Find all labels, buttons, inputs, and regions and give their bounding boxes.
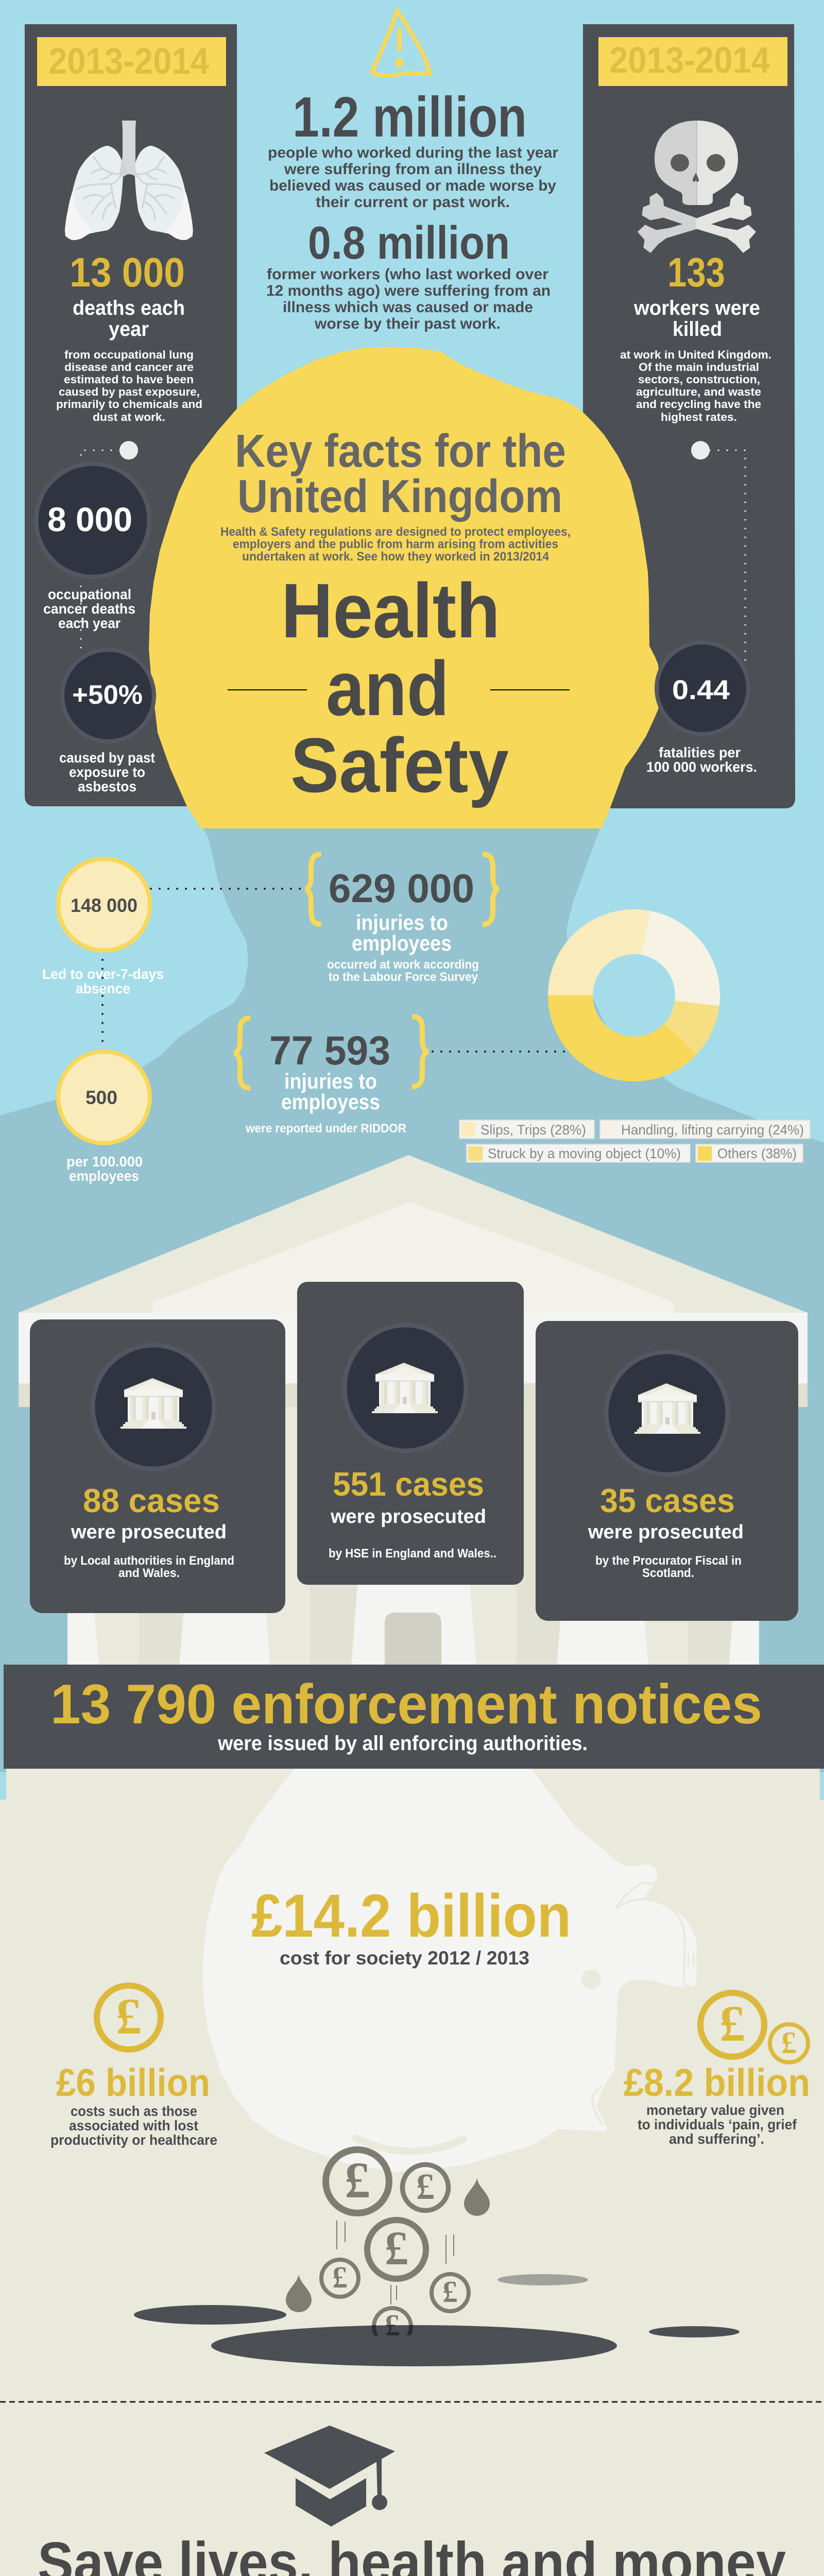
falling coins: £	[385, 2222, 408, 2275]
stat: 133 workers killed: 133	[667, 249, 725, 295]
stat: +50%: caused by past	[59, 750, 155, 766]
stat: 1.2 million	[268, 86, 558, 211]
stat: 0.8 million: illness which was caused or made	[283, 299, 533, 316]
title: Health and Safety: Health	[281, 567, 500, 654]
text: industrial sectors note: sectors, construction,	[638, 373, 760, 386]
text: industrial sectors note: and recycling have the	[636, 398, 761, 411]
dashed divider	[0, 2401, 824, 2403]
text: lung disease note: caused by past exposure,	[59, 385, 200, 398]
stat: 14.2 billion: £14.2 billion	[251, 1882, 571, 1950]
stat: 1.2 million: believed was caused or made worse by	[269, 177, 556, 194]
stat: 500: 500	[85, 1087, 117, 1108]
falling coins: £	[345, 2151, 370, 2209]
stat: 77 593 injuries	[234, 1016, 428, 1136]
stat: 148 000: 148 000	[71, 895, 138, 916]
stat: 0.44	[646, 642, 757, 775]
stat: 6 billion: £	[116, 1988, 142, 2045]
heading: key facts: Key facts for the	[235, 426, 566, 477]
stat: 8.2 billion: £	[781, 2026, 797, 2060]
chart legend: Others (38%)	[717, 1146, 797, 1161]
dotted connector 148 000 to 500	[101, 960, 104, 1043]
panel: procurator fiscal	[536, 1321, 798, 1621]
stat: 6 billion: associated with lost	[69, 2117, 198, 2133]
stat: +50%	[59, 650, 155, 794]
text: intro	[220, 525, 571, 564]
panel: procurator fiscal: 35 cases	[600, 1482, 735, 1519]
icon: graduation cap	[264, 2426, 395, 2527]
stat: 500: per 100.000	[66, 1154, 143, 1170]
stat: 8 000	[36, 464, 149, 631]
node right	[691, 441, 710, 460]
stat: 13 000 deaths: deaths each	[73, 297, 185, 319]
stat: 77 593 injuries: were reported under RIDDOR	[245, 1122, 406, 1136]
stat: 0.44: 0.44	[672, 675, 730, 705]
title: Health and Safety: and	[326, 645, 449, 732]
stat: 14.2 billion: cost for society 2012 / 2013	[280, 1947, 529, 1969]
stat: 1.2 million: 1.2 million	[293, 86, 527, 149]
text: industrial sectors note: Of the main industrial	[639, 361, 759, 374]
stat: 8 000: 8 000	[47, 500, 132, 538]
text: industrial sectors note: at work in United Kingdom.	[620, 348, 771, 361]
stat: 77 593 injuries: employess	[281, 1090, 380, 1114]
text: lung disease note: disease and cancer are	[64, 361, 194, 374]
icon: warning triangle	[372, 10, 430, 76]
stat: 629 000 injuries: occurred at work according	[327, 958, 479, 972]
node left	[119, 441, 138, 460]
stat: 77 593 injuries: injuries to	[284, 1069, 377, 1093]
text: industrial sectors note	[620, 348, 771, 423]
stat: +50%: asbestos	[78, 778, 136, 794]
stat: 500	[58, 1052, 150, 1184]
stat: 6 billion: productivity or healthcare	[50, 2132, 217, 2148]
text: lung disease note: dust at work.	[93, 411, 165, 423]
panel: HSE	[297, 1282, 524, 1585]
stat: 13 000 deaths	[70, 249, 185, 341]
heading: key facts: United Kingdom	[237, 471, 562, 522]
stat: 6 billion: costs such as those	[71, 2103, 197, 2119]
stat: 148 000: absence	[76, 980, 130, 996]
chart legend	[459, 1120, 810, 1162]
stat: 8.2 billion: £8.2 billion	[624, 2061, 810, 2104]
panel: HSE: were prosecuted	[330, 1506, 486, 1528]
chart legend: Slips, Trips (28%)	[480, 1122, 586, 1138]
panel: right dark column	[583, 24, 795, 808]
stat: 1.2 million: their current or past work.	[316, 194, 510, 211]
dotted connector left	[81, 450, 120, 650]
cream lower section	[0, 1769, 824, 2576]
falling coins: £	[332, 2260, 348, 2294]
chart legend: Handling, lifting carrying (24%)	[621, 1122, 804, 1138]
falling coins: £	[385, 2308, 400, 2342]
stat: 6 billion	[50, 1986, 217, 2148]
text: intro: employers and the public from harm arising from activities	[233, 537, 558, 551]
yellow head	[149, 347, 660, 828]
stat: 8.2 billion	[624, 1993, 810, 2147]
title: Health and Safety	[228, 567, 570, 808]
panel: procurator fiscal: were prosecuted	[588, 1521, 744, 1543]
panel: local authorities: and Wales.	[118, 1566, 180, 1580]
banner: enforcement notices: were issued by all enforcing authorities.	[217, 1732, 588, 1755]
panel: local authorities: by Local authorities in England	[64, 1554, 234, 1568]
text: lung disease note	[56, 348, 202, 423]
stat: 13 000 deaths: 13 000	[70, 249, 185, 295]
stat: +50%: +50%	[72, 680, 143, 710]
illustration: courthouse building	[19, 1155, 808, 1670]
stat: 629 000 injuries: 629 000	[329, 866, 474, 911]
panel: procurator fiscal: by the Procurator Fiscal in	[595, 1554, 742, 1568]
stat: 0.44: fatalities per	[659, 744, 741, 760]
donut chart	[548, 909, 720, 1081]
stat: 1.2 million: people who worked during the last year	[268, 144, 558, 161]
drop left	[286, 2274, 312, 2312]
stat: 8.2 billion: and suffering’.	[669, 2131, 764, 2147]
title: Health and Safety: Safety	[290, 722, 509, 808]
stat: 8 000: each year	[58, 615, 121, 631]
text: intro: Health & Safety regulations are designed to protect employees,	[220, 525, 571, 539]
stat: 8.2 billion: to individuals ‘pain, grief	[638, 2116, 797, 2132]
dotted connector 148 000 to 629 000	[151, 888, 302, 890]
chart legend: Struck by a moving object (10%)	[488, 1146, 681, 1161]
falling coins	[321, 2149, 469, 2345]
stat: 77 593 injuries: 77 593	[269, 1027, 390, 1073]
stat: 500: employees	[69, 1168, 139, 1184]
banner: enforcement notices	[4, 1665, 824, 1769]
text: intro: undertaken at work. See how they worked in 2013/2014	[242, 550, 550, 564]
panel: local authorities: were prosecuted	[71, 1521, 227, 1543]
pools	[134, 2274, 740, 2366]
stat: 133 workers killed: killed	[673, 318, 722, 341]
text: industrial sectors note: highest rates.	[661, 411, 737, 423]
panel: procurator fiscal: Scotland.	[642, 1566, 694, 1580]
text: industrial sectors note: agriculture, and waste	[636, 385, 761, 398]
icon: skull and crossbones	[639, 121, 755, 252]
panel: local authorities: 88 cases	[83, 1482, 220, 1519]
year badge right: 2013-2014	[609, 40, 770, 81]
text: lung disease note: estimated to have been	[64, 373, 194, 386]
stat: 8.2 billion: monetary value given	[646, 2102, 784, 2118]
panel: local authorities	[30, 1319, 285, 1613]
icon: lungs	[65, 121, 193, 240]
stat: 148 000: Led to over-7-days	[42, 966, 164, 982]
stat: 629 000 injuries	[305, 854, 499, 984]
stat: 6 billion: £6 billion	[56, 2061, 210, 2104]
text: lung disease note: from occupational lung	[64, 348, 194, 361]
stat: +50%: exposure to	[69, 764, 145, 780]
stat: 629 000 injuries: employees	[352, 931, 452, 955]
drop right	[464, 2178, 490, 2216]
heading: key facts	[235, 426, 566, 522]
stat: 629 000 injuries: injuries to	[356, 910, 448, 935]
stat: 8 000: occupational	[48, 586, 131, 602]
stat: 8 000: cancer deaths	[43, 601, 135, 617]
dotted connector 77 593 to chart	[433, 1050, 570, 1053]
stat: 133 workers killed	[633, 249, 760, 341]
panel: HSE: by HSE in England and Wales..	[329, 1547, 496, 1561]
stat: 0.8 million: 12 months ago) were suffering from an	[266, 282, 551, 299]
panel: left dark column	[25, 24, 237, 806]
stat: 629 000 injuries: to the Labour Force Survey	[329, 970, 478, 984]
panel: HSE: 551 cases	[333, 1465, 484, 1503]
stat: 13 000 deaths: year	[109, 318, 149, 341]
illustration: piggy bank	[202, 1769, 697, 2172]
year badge left: 2013-2014	[48, 41, 209, 82]
stat: 0.8 million: 0.8 million	[308, 217, 510, 269]
stat: 0.8 million: former workers (who last worked over	[267, 266, 548, 283]
banner: enforcement notices: 13 790 enforcement notices	[50, 1673, 762, 1736]
stat: 148 000	[42, 859, 164, 996]
falling coins: £	[385, 2308, 400, 2342]
dotted connector right	[710, 450, 745, 660]
stat: 0.8 million	[266, 217, 551, 332]
stat: 0.8 million: worse by their past work.	[314, 315, 501, 332]
stat: 133 workers killed: workers were	[633, 297, 760, 319]
body silhouette	[0, 824, 824, 1772]
text: lung disease note: primarily to chemicals and	[56, 398, 202, 411]
falling coins: £	[416, 2166, 435, 2207]
stat: 1.2 million: were suffering from an illness they	[284, 161, 542, 178]
stat: 0.44: 100 000 workers.	[646, 759, 757, 775]
falling coins: £	[442, 2275, 458, 2309]
stat: 8.2 billion: £	[719, 1995, 745, 2052]
